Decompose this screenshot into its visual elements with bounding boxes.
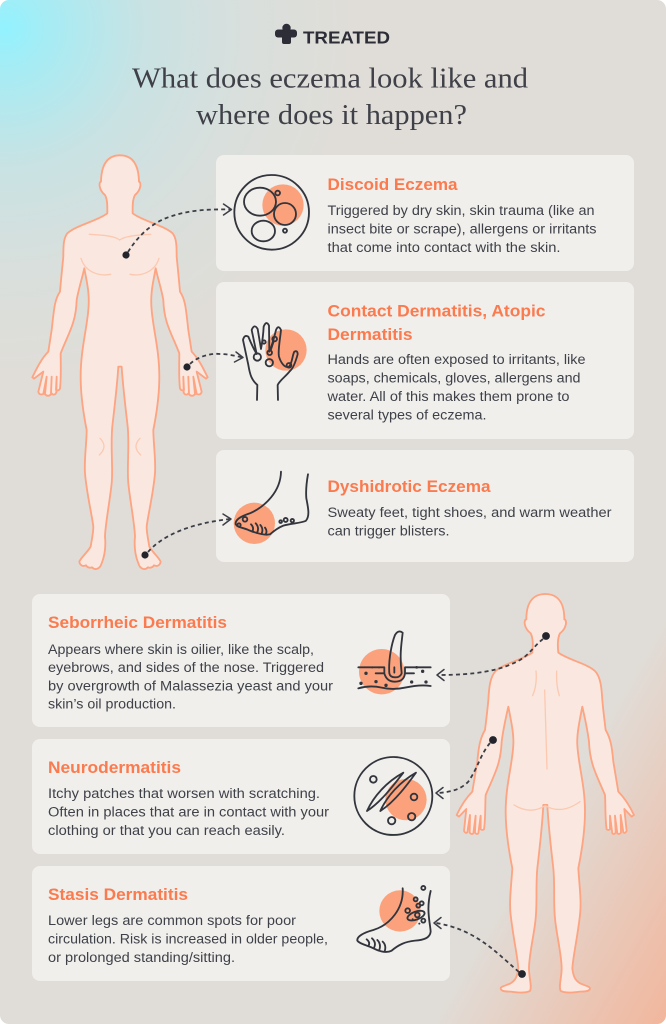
logo wordmark: TREATED: [303, 28, 390, 48]
text block: clothing or that you can reach easily.: [48, 823, 285, 838]
heading: Dyshidrotic Eczema: [328, 478, 491, 496]
arrow: hand to contact dermatitis: [183, 352, 243, 371]
heading: Neurodermatitis: [48, 759, 181, 777]
heading: Dermatitis: [328, 326, 412, 344]
icon: hair follicle: [358, 631, 431, 694]
text block: [328, 203, 597, 255]
text block: circulation. Risk is increased in older people,: [48, 932, 328, 946]
text block: Itchy patches that worsen with scratching.: [48, 786, 320, 801]
logo: Treated: [275, 24, 390, 48]
text block: [326, 352, 586, 422]
arrow: foot to dyshidrotic eczema: [141, 514, 231, 559]
front body figure: [32, 155, 208, 569]
text block: [328, 505, 612, 538]
text block: eyebrows, and sides of the nose. Triggered: [48, 660, 324, 675]
text block: [48, 786, 330, 838]
icon: foot with blisters: [234, 472, 308, 544]
text block: skin’s oil production.: [48, 696, 176, 712]
text block: insect bite or scrape), allergens or irritants: [328, 222, 597, 236]
panel: Neurodermatitis: [32, 739, 450, 854]
text block: Triggered by dry skin, skin trauma (like an: [328, 203, 594, 218]
arrow: chest to discoid eczema: [122, 204, 232, 259]
title: What does eczema look like and: [132, 62, 529, 94]
panel: Discoid Eczema: [216, 155, 634, 271]
back body figure: [457, 594, 634, 993]
text block: [48, 642, 334, 712]
text block: Sweaty feet, tight shoes, and warm weather: [328, 505, 612, 520]
text block: Hands are often exposed to irritants, like: [328, 352, 586, 367]
panel: Contact Dermatitis, Atopic Dermatitis: [216, 282, 634, 439]
panel: Dyshidrotic Eczema: [216, 450, 634, 562]
text block: [48, 913, 328, 965]
arrow: ankle to stasis dermatitis: [434, 918, 526, 978]
text block: soaps, chemicals, gloves, allergens and: [328, 370, 580, 386]
title: where does it happen?: [196, 99, 467, 131]
text block: Often in places that are in contact with your: [48, 804, 330, 820]
text block: water. All of this makes them prone to: [326, 389, 570, 404]
title: [132, 62, 529, 131]
icon: hand: [243, 323, 307, 400]
arrow: arm to neurodermatitis: [436, 736, 497, 798]
text block: Lower legs are common spots for poor: [48, 913, 297, 928]
panel: Stasis Dermatitis: [32, 866, 450, 981]
panel: Seborrheic Dermatitis: [32, 594, 450, 727]
text block: by overgrowth of Malassezia yeast and your: [48, 678, 334, 694]
heading: Stasis Dermatitis: [48, 886, 188, 904]
text block: can trigger blisters.: [328, 524, 450, 538]
text block: or prolonged standing/sitting.: [48, 950, 235, 965]
icon: discoid eczema: [234, 175, 309, 250]
heading: [328, 302, 546, 344]
heading: Discoid Eczema: [328, 176, 458, 194]
icon: lower leg and foot: [357, 886, 431, 952]
arrow: neck to seborrheic dermatitis: [437, 632, 550, 680]
icon: cross logo: [275, 24, 297, 44]
text block: several types of eczema.: [328, 408, 486, 422]
text block: Appears where skin is oilier, like the scalp,: [48, 642, 314, 657]
heading: Seborrheic Dermatitis: [48, 614, 227, 632]
heading: Contact Dermatitis, Atopic: [328, 302, 546, 320]
text block: that come into contact with the skin.: [328, 240, 560, 255]
icon: scratches: [354, 757, 432, 835]
